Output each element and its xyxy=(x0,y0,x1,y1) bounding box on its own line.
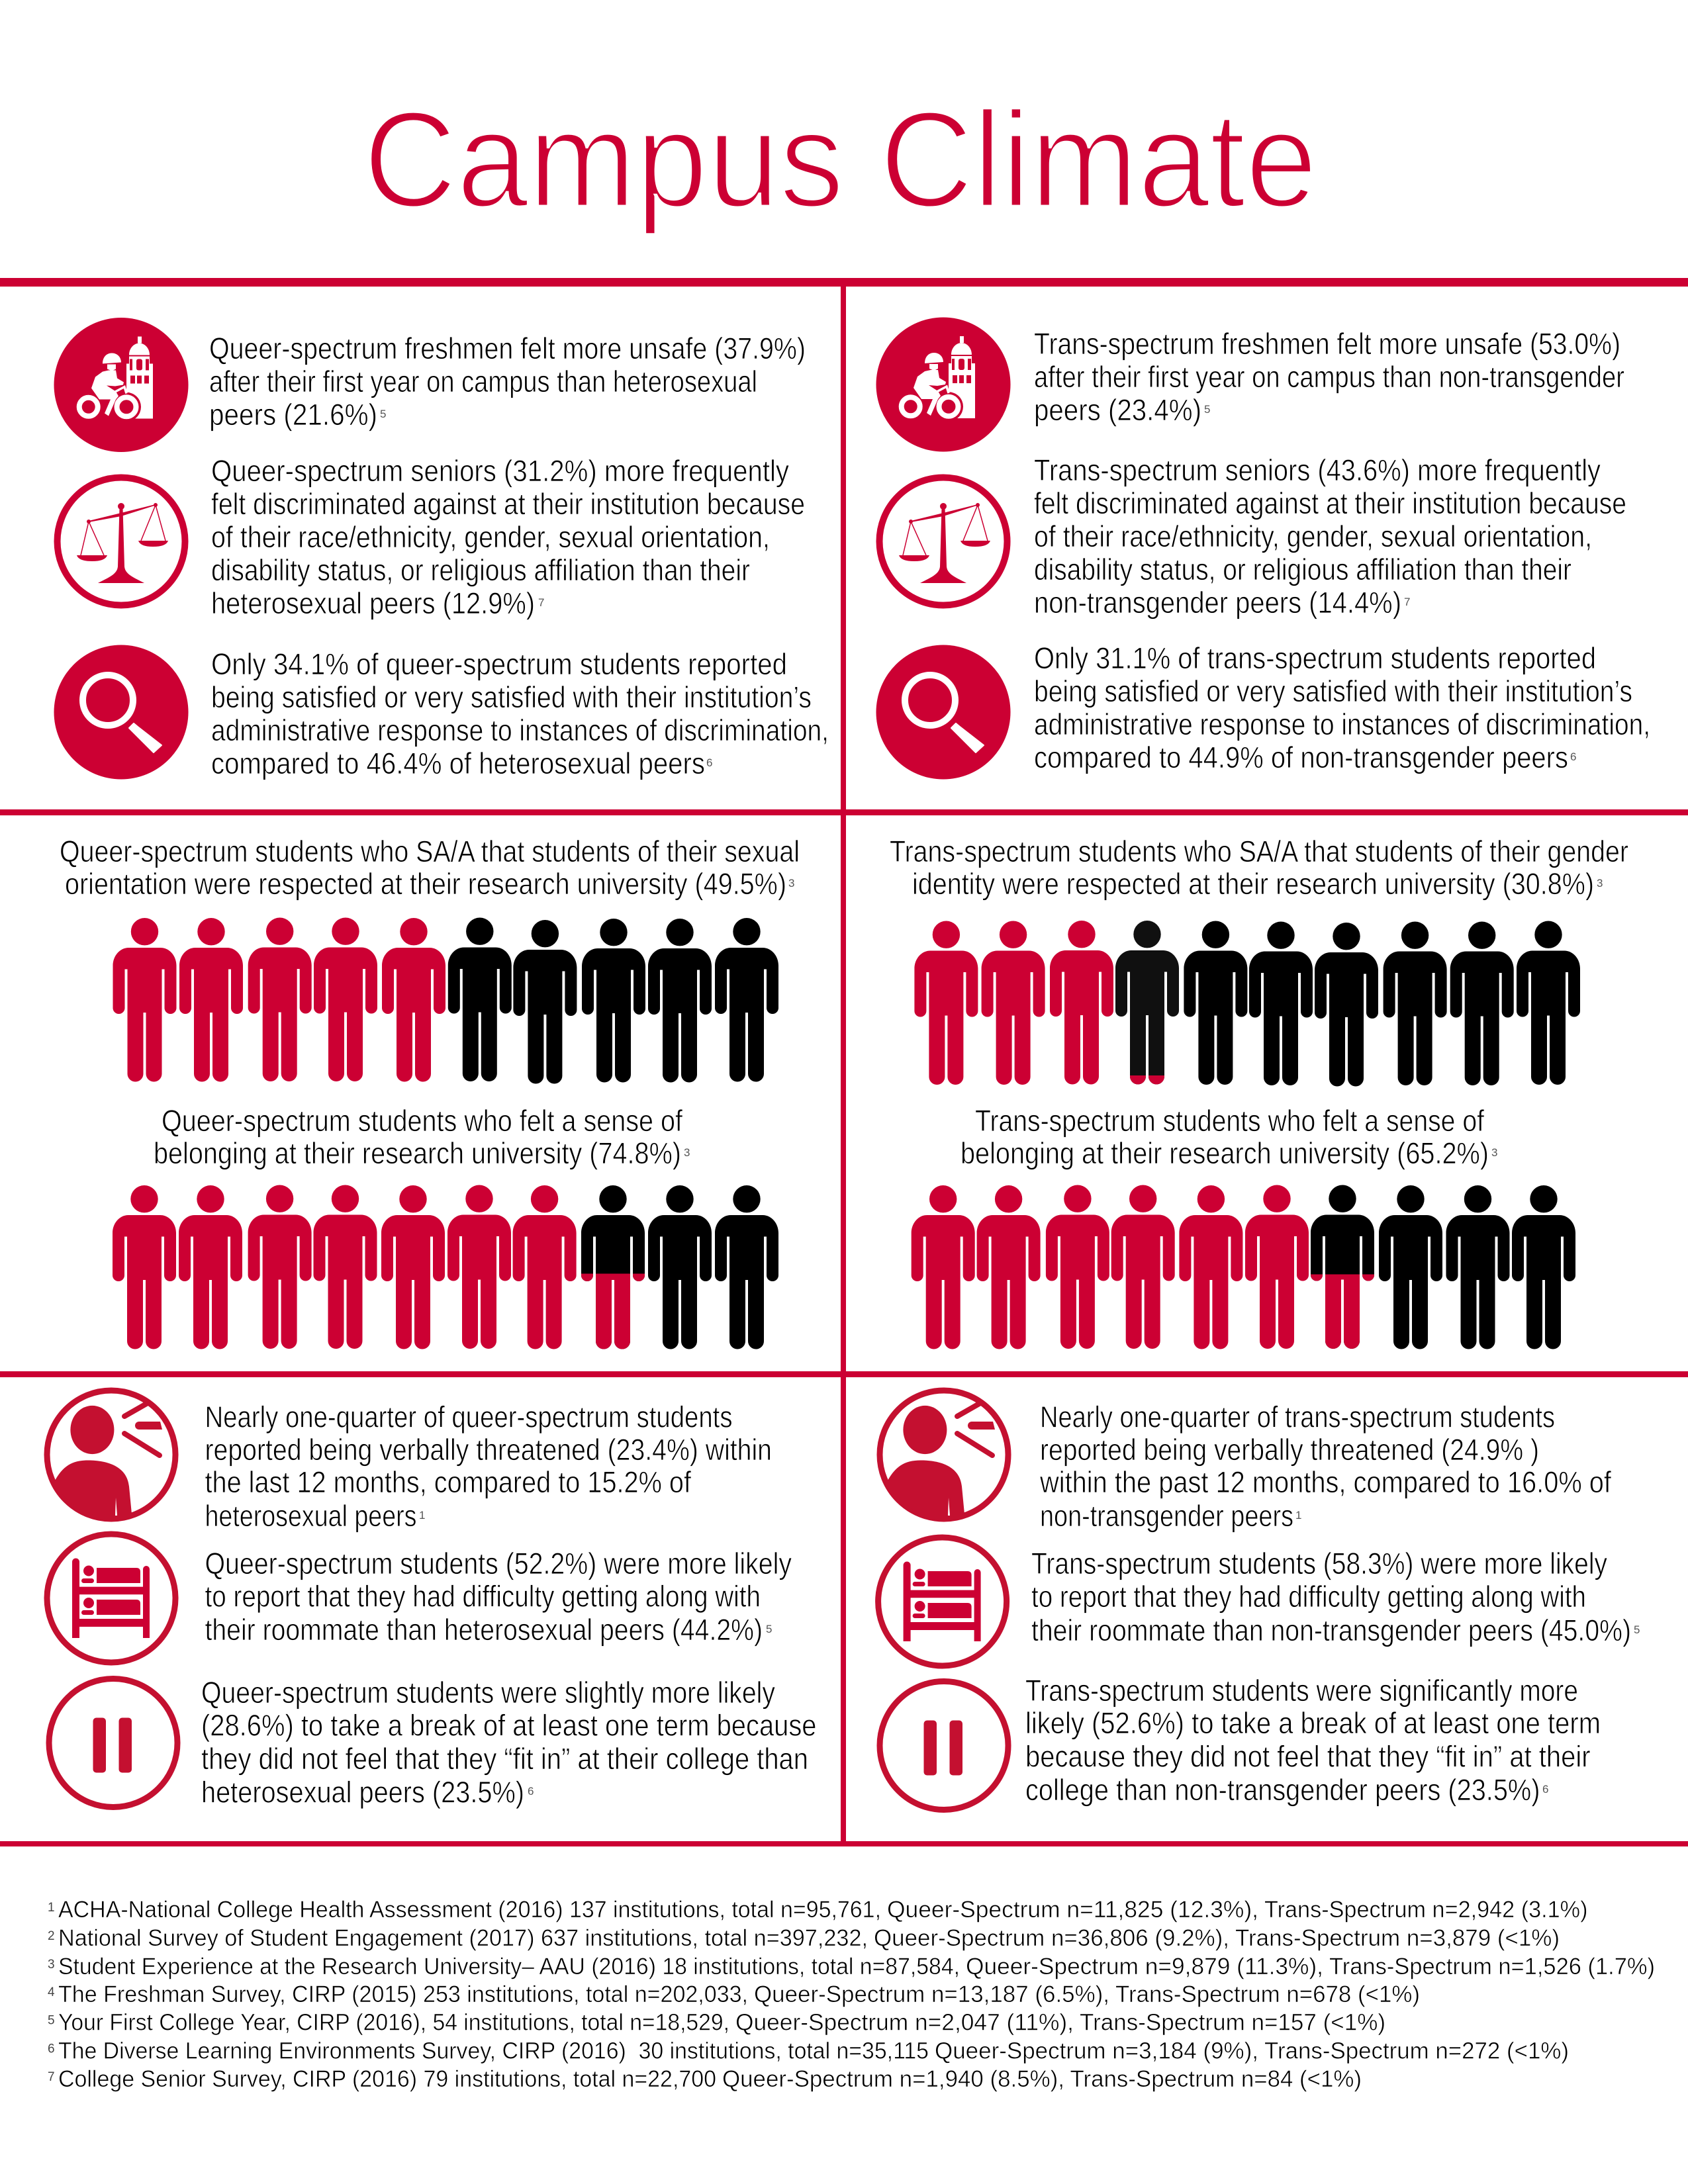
footnotes: survey sources: Queer-Spectrum n=2,047 (11%), xyxy=(735,2010,1074,2036)
footnotes: survey sources: Trans-Spectrum n=2,942 (3.1%) xyxy=(1264,1897,1587,1923)
text: queer freshmen felt unsafe: Queer-spectrum freshmen felt more unsafe (37.9%) xyxy=(209,332,806,365)
footnotes: survey sources: 5 xyxy=(48,2014,55,2028)
icon: person being shouted at xyxy=(45,1390,175,1521)
footnotes: survey sources: 4 xyxy=(48,1985,55,1999)
icon: cyclist and tower xyxy=(876,318,1010,451)
pictogram: 65.2 percent of ten people xyxy=(912,1185,1575,1349)
footnotes: survey sources: Trans-Spectrum n=157 (<1%) xyxy=(1080,2010,1385,2036)
icon: pause xyxy=(49,1678,177,1807)
icon: person being shouted at xyxy=(878,1390,1008,1521)
text: queer roommate difficulty: to report that they had difficulty getting along with xyxy=(205,1579,761,1614)
text: trans verbally threatened: within the past 12 months, compared to 16.0% of xyxy=(1039,1465,1611,1499)
text: queer roommate difficulty: 5 xyxy=(766,1623,772,1635)
panel: queer-spectrum respect and belonging xyxy=(60,835,800,1349)
footnotes: survey sources: College Senior Survey, CIRP (2016) 79 institutions, total n=22,700 xyxy=(58,2066,716,2092)
text: trans verbally threatened: non-transgender peers xyxy=(1040,1499,1293,1533)
footnotes: survey sources: Queer-Spectrum n=3,184 (9%), xyxy=(935,2038,1258,2064)
footnotes: survey sources: 7 xyxy=(48,2070,55,2084)
text: queer verbally threatened: heterosexual peers xyxy=(205,1499,417,1533)
footnotes: survey sources: Trans-Spectrum n=272 (<1%) xyxy=(1264,2038,1569,2064)
pictogram: 30.8 percent of ten people xyxy=(914,921,1580,1087)
text: trans seniors felt discriminated against xyxy=(1034,453,1626,619)
text: trans freshmen felt unsafe: 5 xyxy=(1204,403,1210,416)
text: trans seniors felt discriminated against: Trans-spectrum seniors (43.6%) more frequently xyxy=(1034,453,1601,487)
footnotes: survey sources: Queer-Spectrum n=9,879 (11.3%), xyxy=(966,1954,1323,1979)
text: trans break from college: because they did not feel that they “fit in” at their xyxy=(1025,1739,1591,1773)
text: trans freshmen felt unsafe: peers (23.4%) xyxy=(1034,393,1201,427)
footnotes: survey sources: 6 xyxy=(48,2042,55,2056)
text: queer seniors felt discriminated against xyxy=(211,454,805,620)
text: queer verbally threatened: Nearly one-quarter of queer-spectrum students xyxy=(205,1400,732,1434)
text: queer break from college xyxy=(201,1676,817,1809)
text: queer roommate difficulty: their roommate than heterosexual peers (44.2%) xyxy=(205,1613,763,1647)
text: trans roommate difficulty: 5 xyxy=(1634,1623,1640,1636)
pictogram: 74.8 percent of ten people xyxy=(113,1185,778,1349)
text: queer seniors felt discriminated against: felt discriminated against at their institution because xyxy=(211,487,805,521)
text: trans seniors felt discriminated against: of their race/ethnicity, gender, sexual orientation, xyxy=(1034,520,1592,553)
heading: queer belonging statistic xyxy=(154,1104,690,1170)
text: trans break from college xyxy=(1025,1674,1601,1807)
text: queer satisfaction with administrative response: Only 34.1% of queer-spectrum students reported xyxy=(211,647,787,681)
title: Campus Climate xyxy=(363,83,1317,236)
text: trans satisfaction with administrative response: 6 xyxy=(1570,751,1576,763)
text: trans seniors felt discriminated against: non-transgender peers (14.4%) xyxy=(1034,586,1401,619)
heading: trans respected statistic xyxy=(890,835,1628,901)
text: queer freshmen felt unsafe: peers (21.6%) xyxy=(209,398,377,432)
footnotes: survey sources: Your First College Year, CIRP (2016), 54 institutions, total n=18,529, xyxy=(58,2010,729,2036)
text: queer satisfaction with administrative response xyxy=(211,647,829,780)
heading: queer respected statistic xyxy=(60,835,800,901)
text: queer verbally threatened: reported being verbally threatened (23.4%) within xyxy=(205,1433,772,1467)
text: queer freshmen felt unsafe: 5 xyxy=(380,408,386,420)
text: queer satisfaction with administrative response: compared to 46.4% of heterosexual peers xyxy=(211,747,705,780)
footnotes: survey sources: 2 xyxy=(48,1929,55,1943)
panel: queer-spectrum threats, roommates and stop-outs xyxy=(45,1390,817,1809)
heading: queer belonging statistic: 3 xyxy=(684,1146,690,1159)
text: trans freshmen felt unsafe xyxy=(1034,327,1624,427)
text: queer verbally threatened: the last 12 months, compared to 15.2% of xyxy=(205,1465,691,1499)
text: trans satisfaction with administrative response xyxy=(1034,641,1650,774)
text: trans break from college: college than non-transgender peers (23.5%) xyxy=(1025,1773,1540,1807)
footnotes: survey sources: 1 xyxy=(48,1901,55,1915)
icon: bunk bed xyxy=(878,1537,1007,1666)
text: queer roommate difficulty: Queer-spectrum students (52.2%) were more likely xyxy=(205,1547,792,1580)
footnotes: survey sources: Trans-Spectrum n=1,526 (1.7%) xyxy=(1329,1954,1655,1979)
heading: queer respected statistic: 3 xyxy=(788,877,794,889)
footnotes: survey sources: Queer-Spectrum n=13,187 (6.5%), xyxy=(754,1981,1109,2007)
footnotes: survey sources: Queer-Spectrum n=36,806 (9.2%), xyxy=(874,1925,1229,1951)
footnotes: survey sources: 3 xyxy=(48,1958,55,1972)
heading: queer belonging statistic: belonging at their research university (74.8%) xyxy=(154,1136,681,1170)
text: trans break from college: likely (52.6%) to take a break of at least one term xyxy=(1025,1706,1601,1740)
text: queer verbally threatened: 1 xyxy=(419,1509,425,1522)
heading: queer respected statistic: orientation were respected at their research university (49.5%) xyxy=(65,867,786,901)
text: trans verbally threatened: 1 xyxy=(1295,1509,1301,1522)
footnotes: survey sources xyxy=(48,1897,1655,2092)
text: trans satisfaction with administrative response: compared to 44.9% of non-transgender peers xyxy=(1034,741,1568,774)
footnotes: survey sources: Trans-Spectrum n=678 (<1%) xyxy=(1115,1981,1420,2007)
panel: queer-spectrum campus safety and discrimination xyxy=(54,318,829,780)
text: queer freshmen felt unsafe: after their first year on campus than heterosexual xyxy=(209,365,757,398)
text: trans roommate difficulty: to report that they had difficulty getting along with xyxy=(1031,1580,1586,1614)
panel: trans-spectrum threats, roommates and stop-outs xyxy=(878,1390,1640,1809)
text: queer seniors felt discriminated against: disability status, or religious affiliation than their xyxy=(211,553,750,587)
icon: cyclist and tower xyxy=(54,318,188,452)
text: queer break from college: heterosexual peers (23.5%) xyxy=(201,1776,524,1809)
footnotes: survey sources: Student Experience at the Research University– AAU (2016) 18 institutions, total n=87,584, xyxy=(58,1954,960,1979)
panel: trans-spectrum respect and belonging xyxy=(890,835,1628,1349)
heading: trans belonging statistic: belonging at their research university (65.2%) xyxy=(961,1136,1489,1170)
text: trans verbally threatened: reported being verbally threatened (24.9% ) xyxy=(1040,1433,1539,1467)
footnotes: survey sources: The Freshman Survey, CIRP (2015) 253 institutions, total n=202,033, xyxy=(58,1981,748,2007)
text: queer freshmen felt unsafe xyxy=(209,332,806,432)
text: queer break from college: 6 xyxy=(528,1785,534,1797)
text: queer seniors felt discriminated against: Queer-spectrum seniors (31.2%) more frequently xyxy=(211,454,789,488)
panel: trans-spectrum campus safety and discrimination xyxy=(876,318,1650,780)
footnotes: survey sources: Trans-Spectrum n=84 (<1%) xyxy=(1070,2066,1362,2092)
icon: pause xyxy=(880,1681,1008,1809)
text: queer break from college: (28.6%) to take a break of at least one term because xyxy=(201,1709,817,1743)
text: queer seniors felt discriminated against: heterosexual peers (12.9%) xyxy=(211,586,535,620)
text: queer satisfaction with administrative response: administrative response to instances of discrimination, xyxy=(211,713,829,747)
text: queer satisfaction with administrative response: being satisfied or very satisfied with their institution’s xyxy=(211,680,812,714)
footnotes: survey sources: ACHA-National College Health Assessment (2016) 137 institutions, total n=95,761, xyxy=(58,1897,881,1923)
text: queer break from college: they did not feel that they “fit in” at their college than xyxy=(201,1742,808,1776)
text: queer break from college: Queer-spectrum students were slightly more likely xyxy=(201,1676,775,1709)
heading: trans belonging statistic xyxy=(961,1104,1497,1170)
icon: magnifying glass xyxy=(54,645,188,780)
icon: bunk bed xyxy=(47,1534,175,1662)
text: queer roommate difficulty xyxy=(205,1547,792,1647)
heading: queer belonging statistic: Queer-spectrum students who felt a sense of xyxy=(162,1104,682,1138)
icon: balance scale xyxy=(879,478,1008,605)
text: trans seniors felt discriminated against: 7 xyxy=(1404,596,1410,608)
heading: queer respected statistic: Queer-spectrum students who SA/A that students of their sexual xyxy=(60,835,800,868)
heading: trans belonging statistic: Trans-spectrum students who felt a sense of xyxy=(975,1104,1484,1138)
footnotes: survey sources: National Survey of Student Engagement (2017) 637 institutions, total n=397,232, xyxy=(58,1925,868,1951)
footnotes: survey sources: Queer-Spectrum n=11,825 (12.3%), xyxy=(887,1897,1258,1923)
footnotes: survey sources: Trans-Spectrum n=3,879 (<1%) xyxy=(1235,1925,1560,1951)
text: trans roommate difficulty xyxy=(1031,1547,1640,1647)
text: trans verbally threatened: Nearly one-quarter of trans-spectrum students xyxy=(1040,1400,1555,1434)
text: trans break from college: 6 xyxy=(1542,1783,1548,1796)
text: queer satisfaction with administrative response: 6 xyxy=(706,756,712,769)
heading: trans belonging statistic: 3 xyxy=(1491,1146,1497,1159)
text: queer verbally threatened xyxy=(205,1400,772,1533)
heading: trans respected statistic: 3 xyxy=(1597,877,1603,889)
pictogram: 49.5 percent of ten people xyxy=(113,917,778,1084)
footnotes: survey sources: The Diverse Learning Environments Survey, CIRP (2016) 30 institutions, total n=35,115 xyxy=(58,2038,929,2064)
text: trans break from college: Trans-spectrum students were significantly more xyxy=(1025,1674,1578,1707)
icon: magnifying glass xyxy=(876,645,1010,780)
text: trans satisfaction with administrative response: Only 31.1% of trans-spectrum students reported xyxy=(1034,641,1596,675)
text: queer seniors felt discriminated against: 7 xyxy=(538,596,544,609)
text: queer seniors felt discriminated against: of their race/ethnicity, gender, sexual orientation, xyxy=(211,520,770,554)
heading: trans respected statistic: identity were respected at their research university (30.8%) xyxy=(912,867,1594,901)
icon: balance scale xyxy=(57,478,185,605)
text: trans verbally threatened xyxy=(1039,1400,1611,1533)
text: trans roommate difficulty: Trans-spectrum students (58.3%) were more likely xyxy=(1031,1547,1607,1580)
footnotes: survey sources: Queer-Spectrum n=1,940 (8.5%), xyxy=(722,2066,1064,2092)
text: trans seniors felt discriminated against: disability status, or religious affiliation than their xyxy=(1034,553,1571,586)
